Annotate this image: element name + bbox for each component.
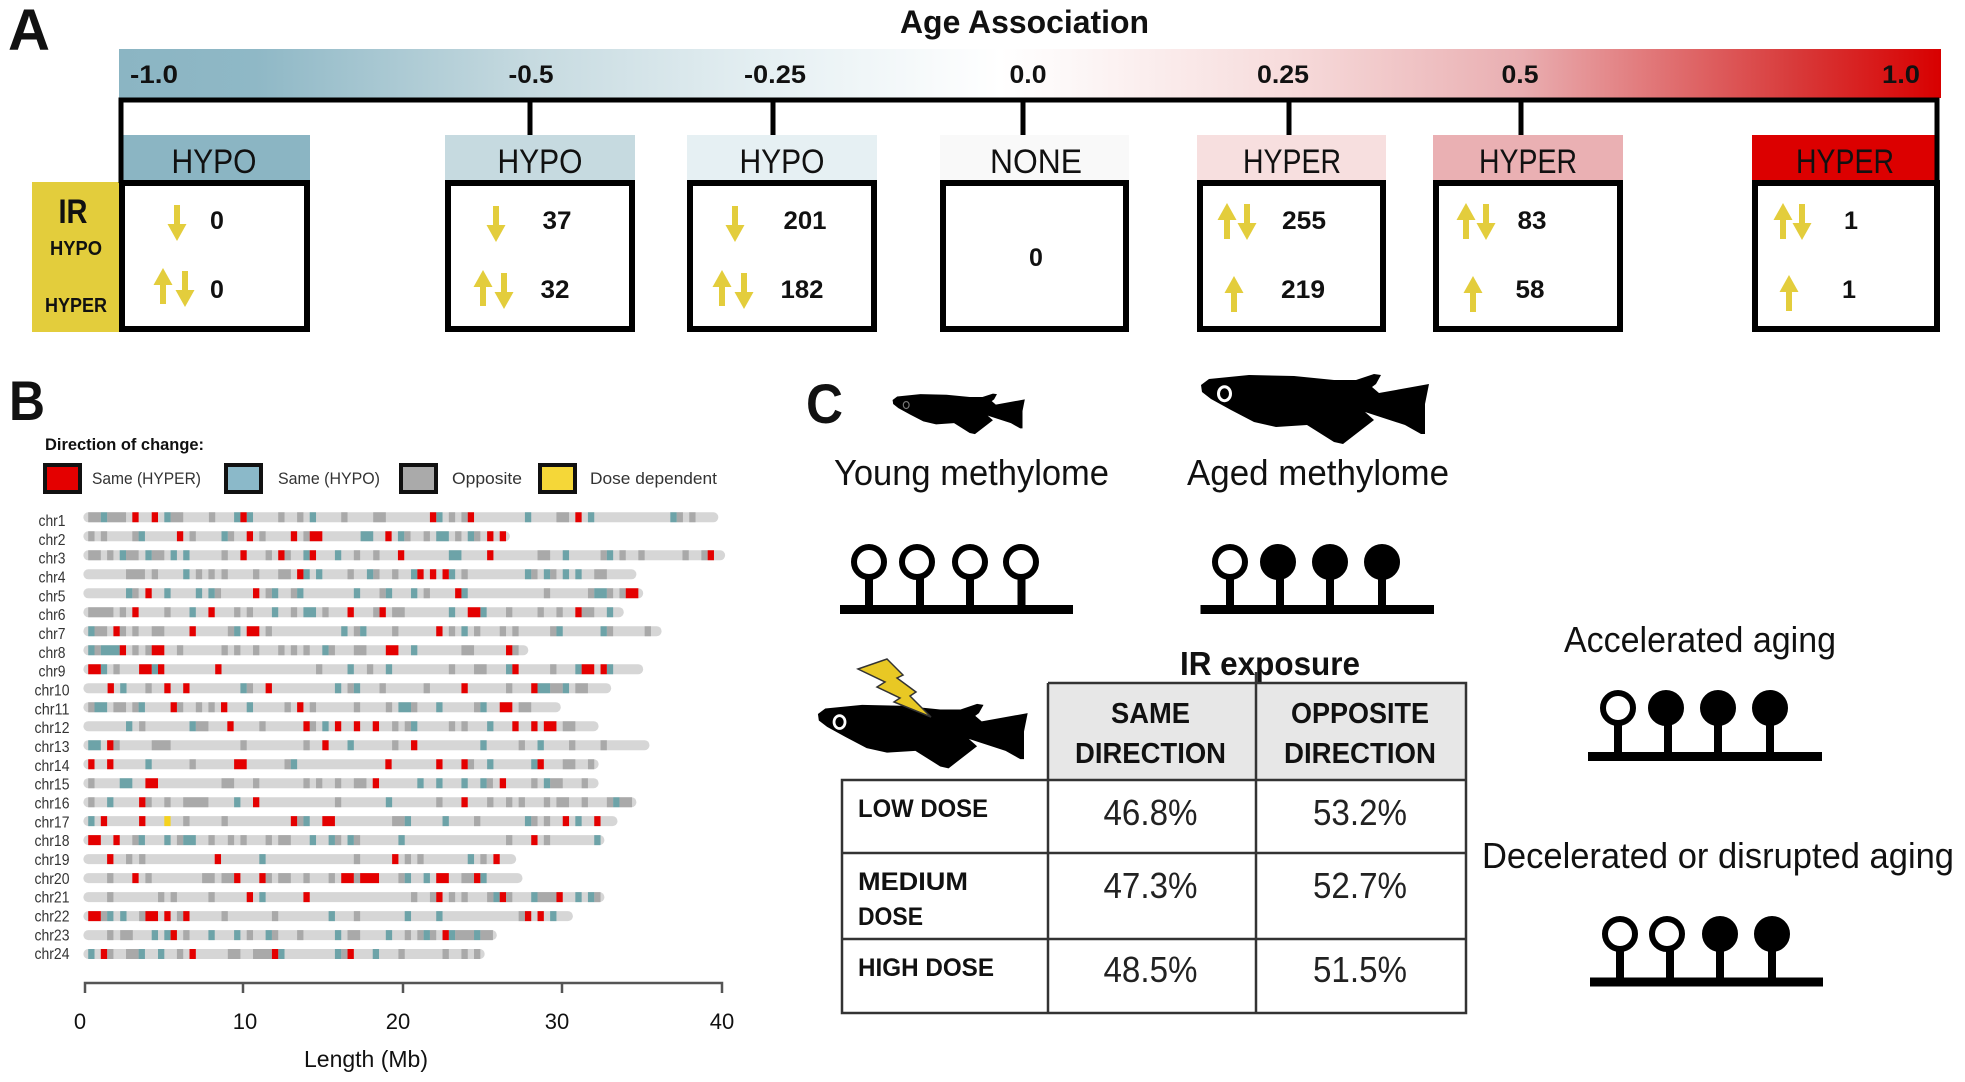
chr17 (34, 814, 618, 831)
table: IR exposure direction by dose: DIRECTION (1075, 738, 1226, 770)
lollipops: accelerated aging (1588, 693, 1822, 756)
IR side label: HYPO (50, 238, 102, 260)
chromosome tracks (34, 512, 725, 963)
chr3 (38, 550, 725, 568)
chr20: chr20 (34, 871, 70, 888)
column: HYPER 1.0: 1 (1844, 207, 1858, 235)
gradient scale bar: -1.0 (130, 61, 178, 89)
icon: aged fish (1201, 374, 1429, 444)
length axis: 30 (545, 1009, 569, 1034)
chr19 (34, 852, 516, 869)
lollipops: aged methylome (1200, 547, 1434, 610)
column: HYPER 1.0: 1 (1842, 276, 1856, 304)
chr17: chr17 (34, 814, 70, 831)
chr2 (38, 531, 510, 549)
table: IR exposure direction by dose: LOW DOSE (858, 795, 988, 823)
table: IR exposure direction by dose: 46.8% (1104, 792, 1198, 833)
gradient scale bar: 1.0 (1882, 61, 1920, 89)
gradient scale bar: 0.5 (1502, 61, 1539, 89)
label: aged methylome: Aged methylome (1187, 452, 1449, 493)
table: IR exposure direction by dose: 52.7% (1313, 865, 1407, 906)
chr12: chr12 (34, 720, 70, 737)
chr6 (38, 607, 624, 624)
chr21 (34, 890, 604, 907)
chr6: chr6 (38, 607, 66, 624)
table: IR exposure direction by dose: 48.5% (1104, 949, 1198, 990)
column: HYPO -1.0 (119, 135, 310, 329)
panel A: age association (8, 0, 1941, 332)
chr1: chr1 (38, 513, 66, 530)
column: HYPER 0.5: 83 (1518, 207, 1546, 235)
chr9 (38, 664, 643, 681)
column: HYPO -1.0: HYPO (172, 143, 256, 181)
chr23 (34, 927, 497, 944)
column: HYPO -0.5: HYPO (498, 143, 582, 181)
table: IR exposure direction by dose: 51.5% (1313, 949, 1407, 990)
panel letter C: C (806, 372, 843, 435)
panel letter B: B (9, 369, 45, 432)
chr16 (34, 796, 636, 812)
column: HYPO -0.25 (687, 135, 877, 329)
chr14: chr14 (34, 758, 70, 775)
chr3: chr3 (38, 551, 66, 568)
chr1 (38, 512, 718, 530)
chr18 (34, 833, 604, 850)
gradient scale bar: 0.25 (1257, 61, 1309, 89)
chr2: chr2 (38, 532, 66, 549)
gradient scale bar: -0.5 (508, 61, 554, 89)
column: HYPO -0.5 (445, 135, 635, 329)
heading: IR exposure: IR exposure (1180, 645, 1360, 682)
column: NONE 0.0 (940, 135, 1129, 329)
column: HYPER 0.5 (1433, 135, 1623, 329)
chr15: chr15 (34, 777, 70, 794)
chr4: chr4 (38, 570, 66, 586)
legend: direction of change (45, 435, 717, 492)
chr14 (34, 758, 599, 775)
column: HYPO -0.25: HYPO (740, 143, 824, 181)
legend: direction of change: Dose dependent (590, 469, 717, 488)
chr11 (34, 701, 561, 718)
IR side label: IR (58, 193, 88, 231)
legend: direction of change: Same (HYPER) (92, 469, 201, 488)
icon: young fish (893, 394, 1025, 434)
chr5 (38, 588, 643, 605)
length axis: 0 (74, 1009, 86, 1034)
IR side label (32, 182, 119, 332)
chr20 (34, 871, 523, 888)
legend: direction of change: Opposite (452, 469, 522, 488)
chr7 (38, 626, 662, 643)
panel C: methylome aging model (806, 372, 1954, 1013)
legend: direction of change: Same (HYPO) (278, 469, 380, 488)
column: HYPO -0.5: 37 (542, 207, 572, 235)
chr15 (34, 777, 599, 794)
chr7: chr7 (38, 626, 66, 643)
chr8 (38, 645, 528, 662)
gradient scale bar (119, 49, 1941, 98)
column: HYPO -1.0: 0 (210, 276, 224, 304)
label: decelerated or disrupted aging: Decelerated or disrupted aging (1482, 835, 1954, 876)
IR side label: HYPER (45, 295, 108, 317)
table: IR exposure direction by dose: SAME (1111, 698, 1190, 730)
chr10 (34, 682, 611, 700)
length axis: 20 (386, 1009, 410, 1034)
chr10: chr10 (34, 682, 70, 700)
length axis: Length (Mb) (304, 1046, 428, 1072)
table: IR exposure direction by dose: DOSE (858, 903, 923, 931)
table: IR exposure direction by dose (842, 672, 1466, 1013)
column: HYPER 0.5: HYPER (1479, 143, 1577, 181)
chr9: chr9 (38, 664, 66, 681)
chr13: chr13 (34, 739, 70, 756)
lollipops: decelerated or disrupted aging (1590, 919, 1823, 982)
table: IR exposure direction by dose: 47.3% (1104, 865, 1198, 906)
gradient scale bar: 0.0 (1010, 61, 1046, 89)
table: IR exposure direction by dose: MEDIUM (858, 868, 968, 896)
column: HYPO -0.25: 182 (780, 276, 824, 304)
column: HYPO -0.25: 201 (784, 207, 827, 235)
heading: Age Association: Age Association (900, 4, 1149, 40)
chr16: chr16 (34, 796, 70, 812)
column: HYPER 0.5: 58 (1516, 276, 1545, 304)
length axis: 40 (710, 1009, 734, 1034)
chr18: chr18 (34, 833, 70, 850)
legend: direction of change: Direction of change: (45, 435, 204, 454)
chr19: chr19 (34, 852, 70, 869)
column: HYPER 0.25 (1197, 135, 1386, 329)
chr23: chr23 (34, 927, 70, 944)
chr21: chr21 (34, 890, 70, 907)
gradient scale bar: -0.25 (744, 61, 806, 89)
icon: irradiated fish with lightning (818, 659, 1028, 768)
column: HYPER 0.25: HYPER (1243, 143, 1341, 181)
chr5: chr5 (38, 588, 66, 605)
table: IR exposure direction by dose: OPPOSITE (1291, 698, 1429, 730)
column: HYPO -0.5: 32 (540, 276, 570, 304)
column: HYPER 1.0: HYPER (1796, 143, 1894, 181)
chr12 (34, 720, 599, 737)
table: IR exposure direction by dose: DIRECTION (1284, 738, 1436, 770)
chr11: chr11 (34, 701, 70, 718)
chr13 (34, 739, 649, 756)
column: HYPER 0.25: 219 (1281, 276, 1325, 304)
label: accelerated aging: Accelerated aging (1564, 619, 1836, 660)
chr24 (34, 946, 485, 963)
table: IR exposure direction by dose: HIGH DOSE (858, 954, 994, 982)
length axis (74, 983, 734, 1072)
column: HYPER 1.0 (1752, 135, 1938, 329)
bracket connectors from scale to boxes (121, 100, 1937, 183)
column: NONE 0.0: NONE (990, 143, 1082, 181)
chr22: chr22 (34, 908, 70, 926)
table: IR exposure direction by dose: 53.2% (1313, 792, 1407, 833)
lollipops: young methylome (840, 547, 1073, 610)
chr22 (34, 908, 573, 926)
length axis: 10 (233, 1009, 257, 1034)
column: HYPO -1.0: 0 (210, 207, 224, 235)
column: HYPER 0.25: 255 (1282, 207, 1326, 235)
label: young methylome: Young methylome (834, 452, 1109, 493)
chr4 (38, 569, 636, 586)
panel B: chromosome map (9, 369, 734, 1072)
column: NONE 0.0: 0 (1029, 244, 1043, 272)
chr24: chr24 (34, 946, 70, 963)
chr8: chr8 (38, 645, 66, 662)
